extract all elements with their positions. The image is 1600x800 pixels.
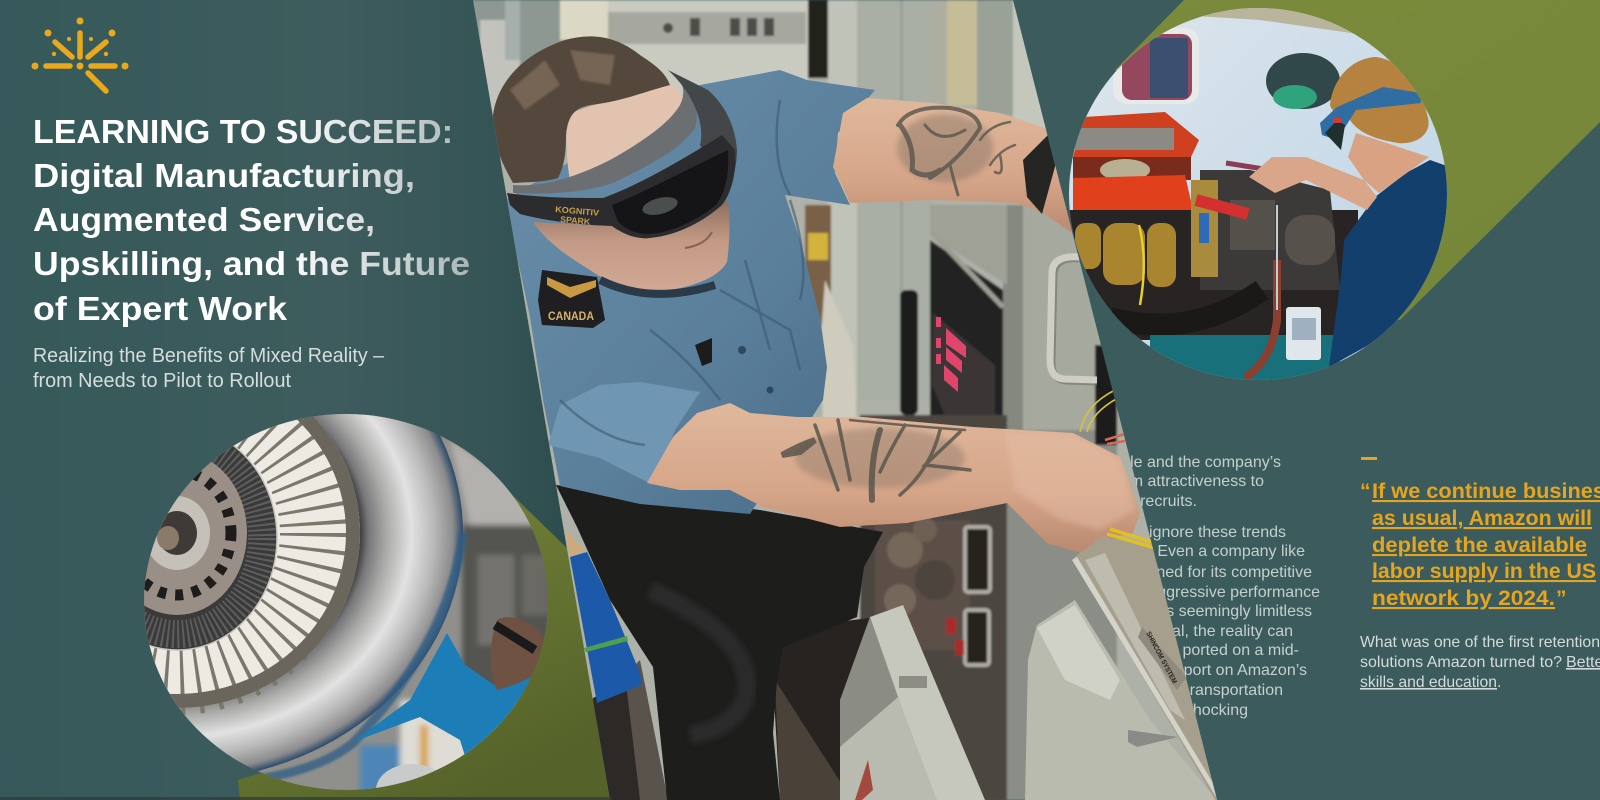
head: lower face	[533, 200, 729, 290]
body text below quote: .	[1497, 674, 1501, 691]
door latch	[1128, 730, 1178, 747]
yellow cable in hand	[1107, 529, 1155, 548]
headset outer rim	[668, 70, 737, 190]
hand highlight	[1005, 432, 1135, 530]
title: Augmented Service,	[33, 201, 375, 238]
crumpled wrap	[820, 280, 858, 417]
hangar background	[360, 440, 552, 795]
upper arm tattoo	[897, 108, 1015, 195]
reflective nacelle edge	[253, 533, 463, 780]
teal body text column (behind main photo): . Even a company like	[1148, 543, 1305, 560]
red cowl	[1073, 112, 1199, 157]
head: forehead	[566, 82, 694, 180]
wrist watch	[1023, 135, 1056, 214]
left window	[1113, 28, 1199, 104]
pants	[556, 485, 883, 800]
rolled sleeve	[548, 382, 700, 485]
pull quote: “	[1360, 480, 1370, 503]
rack top unit	[930, 205, 1007, 285]
olive shape behind engine photo	[238, 488, 610, 800]
teal body text column (behind main photo): recruits.	[1140, 493, 1197, 510]
teal body text column (behind main photo): ransportation	[1190, 682, 1283, 699]
teal body text column (behind main photo): port on Amazon’s	[1184, 662, 1307, 679]
body text below quote: skills and education	[1360, 674, 1497, 691]
lower arm tattoo	[782, 420, 970, 500]
teal body text column (behind main photo): hocking	[1193, 702, 1248, 719]
right grey cabinet	[1025, 600, 1217, 800]
olive shape behind right photo	[1115, 0, 1600, 320]
pull quote: network by 2024.	[1372, 587, 1555, 610]
teal body text column (behind main photo): ported on a mid-	[1182, 642, 1299, 659]
body text below quote: What was one of the first retention	[1360, 634, 1600, 651]
teal body text column (behind main photo): s seemingly limitless	[1166, 603, 1312, 620]
pull quote: labor supply in the US	[1372, 560, 1596, 583]
yellow wires	[1080, 390, 1118, 432]
title: Digital Manufacturing,	[33, 157, 415, 194]
title	[33, 113, 470, 327]
mechanic shirt	[1329, 160, 1450, 367]
mechanic neck and arm	[1348, 133, 1429, 193]
main photo: technician with headset	[470, 0, 1222, 800]
LED panel dots	[936, 317, 966, 392]
subtitle	[33, 345, 385, 392]
headset brand text	[555, 204, 600, 227]
body text below quote: solutions Amazon turned to?	[1360, 654, 1562, 671]
right circle photo: mechanic at aircraft engine	[1060, 0, 1460, 400]
title: of Expert Work	[33, 290, 288, 327]
collar shadow	[600, 280, 715, 294]
right window	[1266, 53, 1340, 109]
quote dash	[1361, 457, 1377, 460]
rack display digits	[663, 18, 774, 36]
teal body text column (behind main photo): m attractiveness to	[1130, 473, 1264, 490]
title: Upskilling, and the Future	[33, 245, 470, 282]
black rack	[930, 240, 1003, 430]
teal body text column (behind main photo): ggressive performance	[1157, 584, 1320, 601]
shoulder patch	[538, 270, 605, 328]
door handle	[1052, 259, 1097, 382]
right wall	[1024, 206, 1123, 434]
shirt torso	[505, 70, 875, 514]
teal base	[1150, 335, 1340, 385]
body text below quote	[1360, 634, 1600, 691]
cream and blue bag	[565, 530, 585, 557]
door sticker	[1138, 627, 1187, 690]
logo: gold spark	[32, 18, 128, 91]
technician in blue	[354, 633, 531, 754]
subtitle: Realizing the Benefits of Mixed Reality –	[33, 345, 385, 367]
dark blade ring	[144, 445, 278, 651]
headset brand text: SPARK	[560, 214, 591, 227]
left grey cabinet	[840, 605, 985, 800]
hair	[493, 36, 670, 183]
white filter	[1286, 307, 1321, 360]
aircraft fuselage	[1060, 0, 1460, 400]
teal body text column (behind main photo): le and the company’s	[1130, 454, 1281, 471]
inner disc with bolts	[144, 462, 247, 615]
shirt folds	[560, 100, 803, 445]
floor strip	[592, 691, 640, 800]
pull quote: deplete the available	[1372, 534, 1587, 557]
headset brand text: KOGNITIV	[555, 204, 600, 218]
subtitle: from Needs to Pilot to Rollout	[33, 370, 291, 392]
right teal background panel	[900, 0, 1600, 800]
pull quote	[1360, 480, 1600, 610]
nacelle ring	[150, 414, 463, 771]
engine circle photo	[144, 414, 548, 790]
lower arm	[647, 403, 1140, 553]
headset upper band	[513, 85, 697, 194]
bottom edge strip	[0, 797, 612, 800]
lifted door panel	[1072, 536, 1222, 800]
cylinder heads	[1075, 223, 1176, 287]
pull quote: as usual, Amazon will	[1372, 507, 1592, 530]
left teal panel	[0, 0, 610, 800]
photo background: equipment room	[470, 0, 1220, 800]
teal body text column (behind main photo): ignore these trends	[1149, 524, 1286, 541]
engine body	[1068, 210, 1358, 340]
teal body text column (behind main photo): ned for its competitive	[1156, 564, 1312, 581]
teal body text column (behind main photo): al, the reality can	[1172, 623, 1293, 640]
door sticker: SHINCOM SYSTEM	[1144, 631, 1178, 685]
right arm	[833, 98, 1075, 235]
title: LEARNING TO SUCCEED:	[33, 113, 453, 150]
black hose	[1110, 290, 1262, 325]
hair	[1330, 57, 1429, 143]
pull quote: ”	[1556, 587, 1566, 610]
teal body text column (behind main photo)	[1130, 454, 1320, 719]
headset visor	[507, 135, 735, 238]
lower machinery background	[1007, 430, 1117, 800]
shoulder patch: CANADA	[548, 311, 594, 323]
holographic headband	[1320, 87, 1421, 140]
brown post and yellow tag	[805, 205, 831, 325]
fan spokes	[144, 416, 360, 708]
